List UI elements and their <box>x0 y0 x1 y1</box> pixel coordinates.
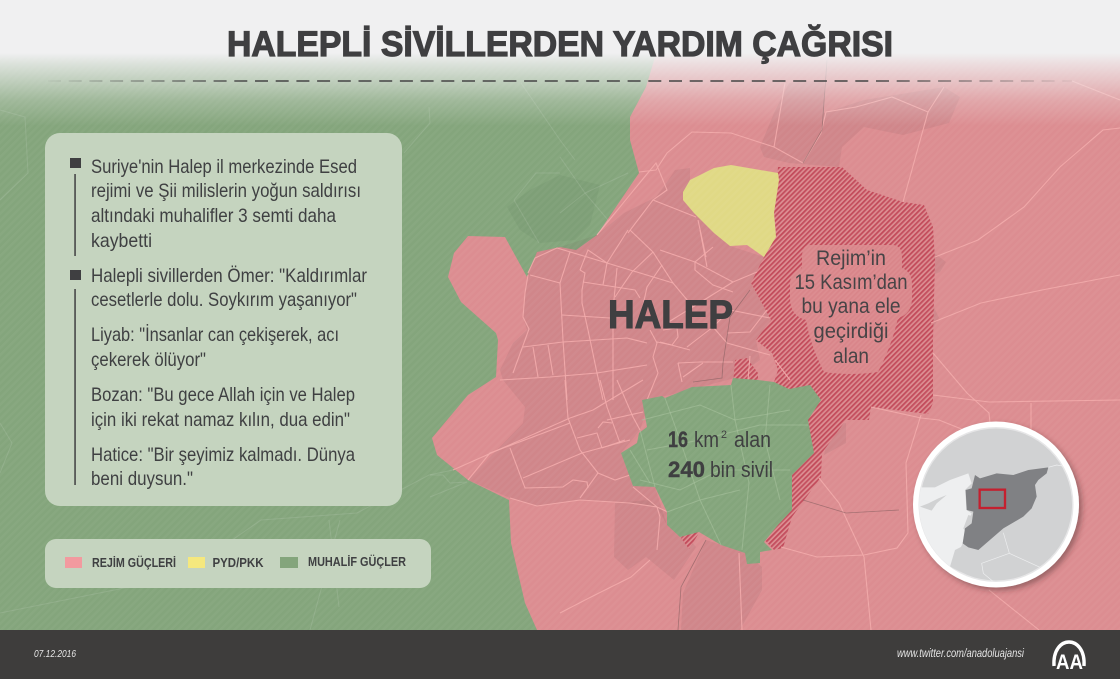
map: road network <box>453 81 1120 630</box>
legend: regime forces <box>65 555 176 570</box>
seized area label <box>790 245 912 374</box>
pocket label: area and civilians: 240 <box>668 457 705 482</box>
bullet one text: Suriye'nin Halep il merkezinde Esed <box>91 156 357 178</box>
bullet two marker <box>70 270 81 485</box>
title: HALEPLİ SİVİLLERDEN YARDIM ÇAĞRISI <box>227 24 893 64</box>
legend: opposition forces <box>280 554 407 569</box>
seized area label: alan <box>833 345 869 368</box>
bullet one text: rejimi ve Şii milislerin yoğun saldırısı <box>91 180 361 202</box>
bullet two quotes: için iki rekat namaz kılın, dua edin" <box>91 409 350 431</box>
map: darker patch in opposition territory <box>507 175 600 243</box>
legend <box>45 539 431 588</box>
legend: opposition forces: MUHALİF GÜÇLER <box>308 554 407 569</box>
seized area label: geçirdiği <box>814 320 888 343</box>
text panel <box>45 133 402 506</box>
map: PYD/PKK area <box>683 165 779 257</box>
pocket label: area and civilians: 2 <box>721 429 727 441</box>
title divider <box>48 80 1072 82</box>
bullet two quotes <box>91 265 367 490</box>
seized area label: bu yana ele <box>802 295 900 318</box>
locator: Syria shape <box>963 467 1048 550</box>
city label: HALEP <box>608 293 733 337</box>
map: darker built-up areas <box>468 80 960 630</box>
map: opposition-held territory west <box>0 0 680 630</box>
map: pale roads over opposition territory <box>0 83 628 630</box>
pocket label: area and civilians <box>668 427 773 482</box>
map: besieged opposition pocket <box>621 378 821 564</box>
map: seized area hatching <box>681 167 935 550</box>
bullet two quotes: çekerek ölüyor" <box>91 349 206 371</box>
bullet two quotes: Liyab: "İnsanlar can çekişerek, acı <box>91 323 339 346</box>
date: 07.12.2016 <box>34 648 76 660</box>
bullet one marker <box>70 158 81 256</box>
bullet two quotes: Bozan: "Bu gece Allah için ve Halep <box>91 384 355 406</box>
pocket label: area and civilians: bin sivil <box>710 457 773 482</box>
icon: Anadolu Agency logo: AA <box>1056 651 1083 674</box>
footer bar <box>0 630 1120 679</box>
bullet one text: kaybetti <box>91 230 152 252</box>
bullet one text <box>91 156 361 252</box>
pocket label: area and civilians: 16 <box>668 427 688 452</box>
map: railway and river lines <box>678 60 899 630</box>
locator map: Syria <box>900 422 1079 600</box>
locator: Cyprus <box>920 495 947 511</box>
locator: Aleppo marker <box>980 490 1005 508</box>
icon: Anadolu Agency logo <box>1054 642 1084 674</box>
locator: borders <box>982 465 1067 582</box>
legend: regime forces: REJİM GÜÇLERİ <box>92 555 176 570</box>
bullet two quotes: beni duysun." <box>91 468 193 490</box>
bullet two quotes: Hatice: "Bir şeyimiz kalmadı. Dünya <box>91 444 355 466</box>
locator: Lebanon and Israel <box>950 515 970 572</box>
seized area label: Rejim’in <box>816 247 886 270</box>
legend: PYD/PKK: PYD/PKK <box>212 555 264 570</box>
header fade <box>0 0 1120 126</box>
pocket label: area and civilians: km <box>694 427 719 452</box>
locator: sea <box>919 474 972 566</box>
bullet two quotes: Halepli sivillerden Ömer: "Kaldırımlar <box>91 265 367 287</box>
bullet two quotes: cesetlerle dolu. Soykırım yaşanıyor" <box>91 289 357 311</box>
legend: PYD/PKK <box>188 555 264 570</box>
seized area label: 15 Kasım’dan <box>794 271 908 294</box>
pocket label: area and civilians: alan <box>734 427 771 452</box>
bullet one text: altındaki muhalifler 3 semti daha <box>91 205 336 227</box>
twitter address: www.twitter.com/anadoluajansi <box>897 648 1024 660</box>
